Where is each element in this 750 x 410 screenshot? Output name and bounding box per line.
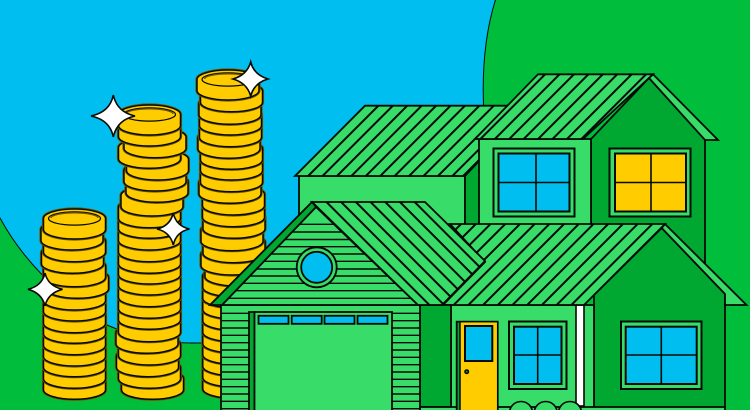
window: dormer blue <box>494 148 574 216</box>
round gable window <box>297 247 337 287</box>
bushes <box>510 402 582 410</box>
back wing roof <box>292 104 508 177</box>
column beside garage <box>420 305 451 407</box>
gable left fascia <box>210 202 316 305</box>
dormer roof <box>475 74 653 139</box>
main roof <box>444 223 668 306</box>
front entry wall <box>451 305 594 410</box>
background: right green hill <box>483 0 750 410</box>
lower right gable wall <box>594 228 725 410</box>
lower gable fascia <box>662 224 746 305</box>
dormer fascia <box>649 74 718 140</box>
garage door frame strip <box>249 312 254 410</box>
garage door <box>254 312 392 410</box>
window: front small <box>509 322 566 389</box>
coin stack: middle <box>116 105 188 399</box>
back wing side wall <box>465 160 480 230</box>
dormer right gable wall <box>591 78 705 270</box>
house <box>210 74 746 410</box>
coin stack: left <box>41 209 108 399</box>
white post <box>576 305 584 406</box>
ground strip <box>420 407 725 410</box>
sparkle: middle stack centre <box>157 213 190 245</box>
window: front large <box>621 322 702 389</box>
sparkle: left stack <box>28 273 62 306</box>
background: left green hill <box>0 218 520 410</box>
garage roof <box>312 202 485 305</box>
window: dormer yellow <box>610 148 690 216</box>
door <box>457 322 498 410</box>
sparkle: middle stack large <box>91 95 135 137</box>
garage wall with siding <box>221 305 420 410</box>
garage gable with siding <box>222 207 418 305</box>
sparkle: right stack top <box>233 62 268 96</box>
back wing wall <box>299 176 465 230</box>
coin stack: right <box>197 70 267 398</box>
dormer front wall <box>479 139 591 229</box>
